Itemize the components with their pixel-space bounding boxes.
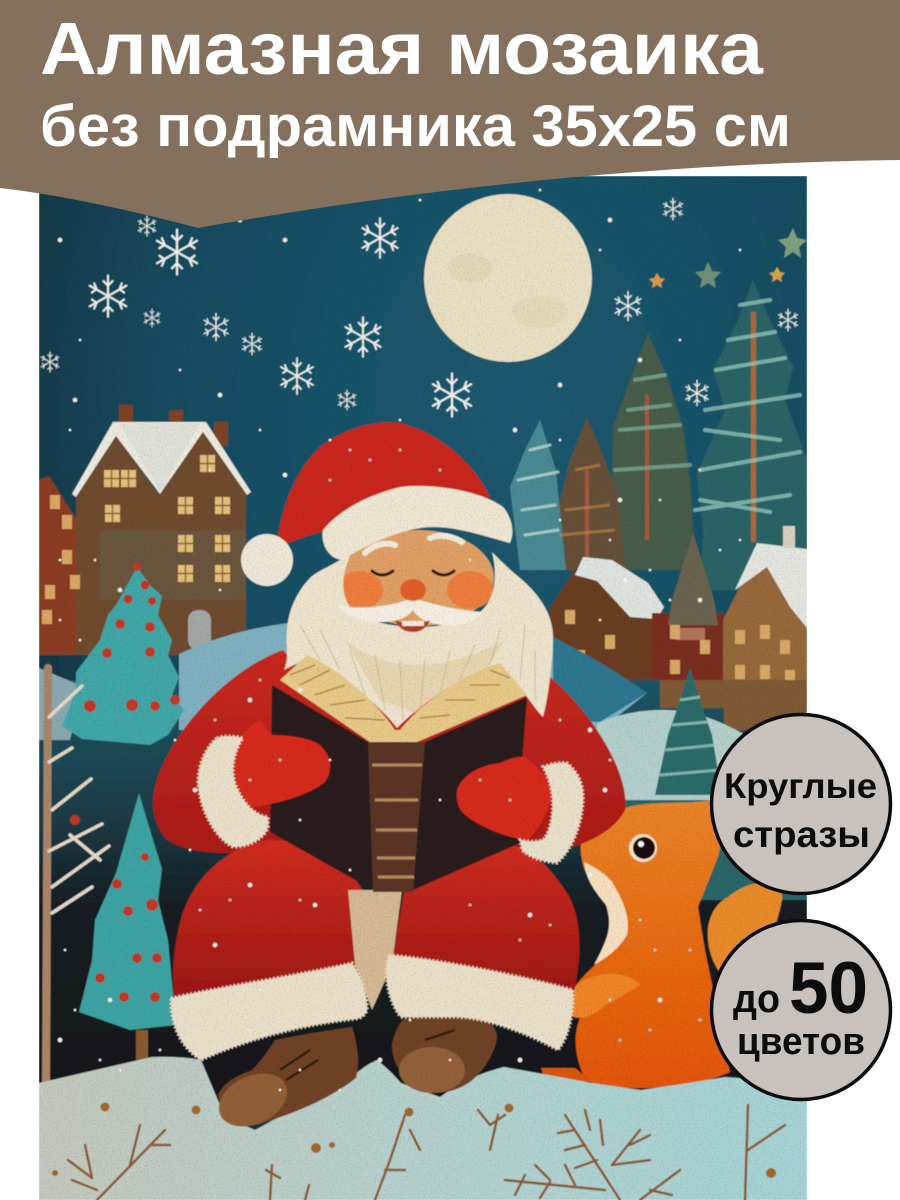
badge: up to 50 colours: до <box>733 977 780 1021</box>
beard <box>284 552 553 728</box>
Santa <box>153 422 626 1137</box>
night sky <box>39 176 807 1200</box>
falling snow <box>60 190 740 1090</box>
boots <box>217 1026 359 1127</box>
header banner <box>0 0 900 228</box>
badge: round rhinestones: стразы <box>733 814 870 855</box>
teal fir trees left <box>62 563 184 1060</box>
fur between the legs <box>348 890 402 1010</box>
mouth <box>395 620 430 632</box>
closed eyes <box>372 571 454 575</box>
badge: round rhinestones: Круглые <box>724 767 877 806</box>
illustration: Santa reading a book <box>39 176 807 1200</box>
hat <box>277 422 490 545</box>
houses right <box>549 525 807 681</box>
left mitten <box>232 720 330 807</box>
hat brim <box>322 486 512 560</box>
small snowy fir <box>655 668 722 795</box>
badge: round rhinestones <box>712 714 890 894</box>
badge: up to 50 colours: цветов <box>737 1021 865 1063</box>
squirrel tail <box>708 883 782 985</box>
badge: up to 50 colours <box>712 920 890 1100</box>
canvas grain <box>39 176 807 1200</box>
snowy ground <box>39 1057 807 1200</box>
legs <box>173 840 579 1000</box>
background fir trees right <box>510 280 807 590</box>
right mitten <box>457 757 553 840</box>
bare birch tree <box>46 668 109 1083</box>
moustache <box>337 598 483 625</box>
squirrel <box>541 800 730 1088</box>
book pages <box>280 655 527 742</box>
moon <box>424 194 592 362</box>
snowy hills <box>39 623 807 1100</box>
book cover <box>270 685 527 890</box>
sleeve cuffs <box>198 736 268 847</box>
subtitle: без подрамника 35х25 см <box>40 94 791 159</box>
title: Алмазная мозаика <box>40 7 764 90</box>
badge: up to 50 colours: 50 <box>789 948 868 1029</box>
brown twigs and seeds on the snow <box>52 1102 785 1200</box>
hat pompom <box>241 534 293 586</box>
face <box>342 530 494 626</box>
houses left <box>39 405 251 655</box>
body and arms <box>153 650 626 855</box>
snowflakes and stars <box>41 198 807 774</box>
book spine <box>368 742 425 892</box>
leg fur cuffs <box>171 963 367 1060</box>
nose <box>400 579 426 601</box>
eyebrows <box>365 536 462 553</box>
